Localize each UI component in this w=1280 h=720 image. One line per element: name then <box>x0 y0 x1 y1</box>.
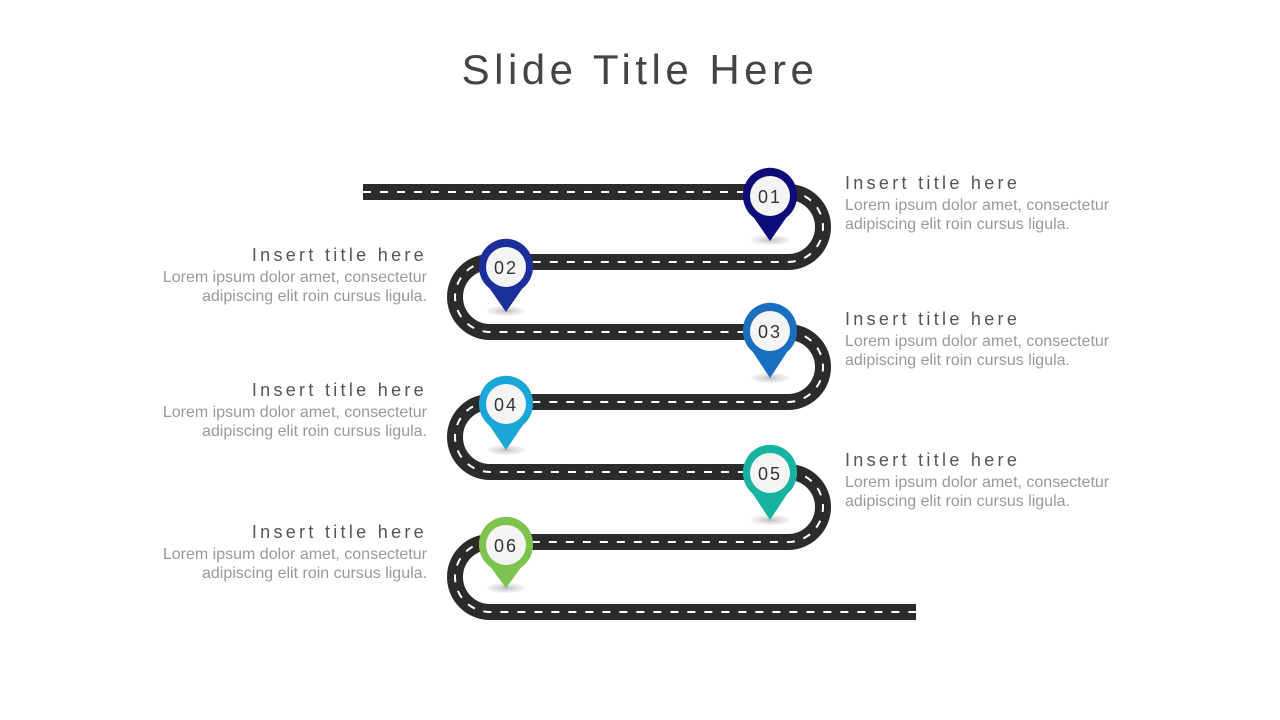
text 04: Lorem ipsum dolor amet, consectetur <box>163 404 427 421</box>
text 06: adipiscing elit roin cursus ligula. <box>202 565 427 582</box>
text 02: Insert title here <box>252 245 427 265</box>
text 03: Insert title here <box>845 309 1020 329</box>
pin 06 <box>479 517 533 593</box>
text 06 <box>163 522 427 582</box>
text 01 <box>845 173 1109 233</box>
text 03: Lorem ipsum dolor amet, consectetur <box>845 333 1109 350</box>
text 06: Insert title here <box>252 522 427 542</box>
pin 06: 06 <box>494 536 518 556</box>
text 03: adipiscing elit roin cursus ligula. <box>845 352 1070 369</box>
pin 01: 01 <box>758 187 782 207</box>
text 02: adipiscing elit roin cursus ligula. <box>202 288 427 305</box>
text 02: Lorem ipsum dolor amet, consectetur <box>163 269 427 286</box>
text 01: adipiscing elit roin cursus ligula. <box>845 216 1070 233</box>
text 04 <box>163 380 427 440</box>
text 05: Lorem ipsum dolor amet, consectetur <box>845 474 1109 491</box>
pin 03: 03 <box>758 322 782 342</box>
road <box>363 192 916 612</box>
text 04: adipiscing elit roin cursus ligula. <box>202 423 427 440</box>
text 05 <box>845 450 1109 510</box>
pin 04 <box>479 376 533 455</box>
text 05: Insert title here <box>845 450 1020 470</box>
text 05: adipiscing elit roin cursus ligula. <box>845 493 1070 510</box>
pin 03 <box>743 303 797 383</box>
pin 04: 04 <box>494 395 518 415</box>
text 06: Lorem ipsum dolor amet, consectetur <box>163 546 427 563</box>
pin 02: 02 <box>494 258 518 278</box>
pin 01 <box>743 168 797 245</box>
pin 05 <box>743 445 797 525</box>
pin 05: 05 <box>758 464 782 484</box>
text 01: Insert title here <box>845 173 1020 193</box>
pin 02 <box>479 239 533 316</box>
text 03 <box>845 309 1109 369</box>
text 04: Insert title here <box>252 380 427 400</box>
text 01: Lorem ipsum dolor amet, consectetur <box>845 197 1109 214</box>
text 02 <box>163 245 427 305</box>
title: Slide Title Here <box>462 46 818 93</box>
